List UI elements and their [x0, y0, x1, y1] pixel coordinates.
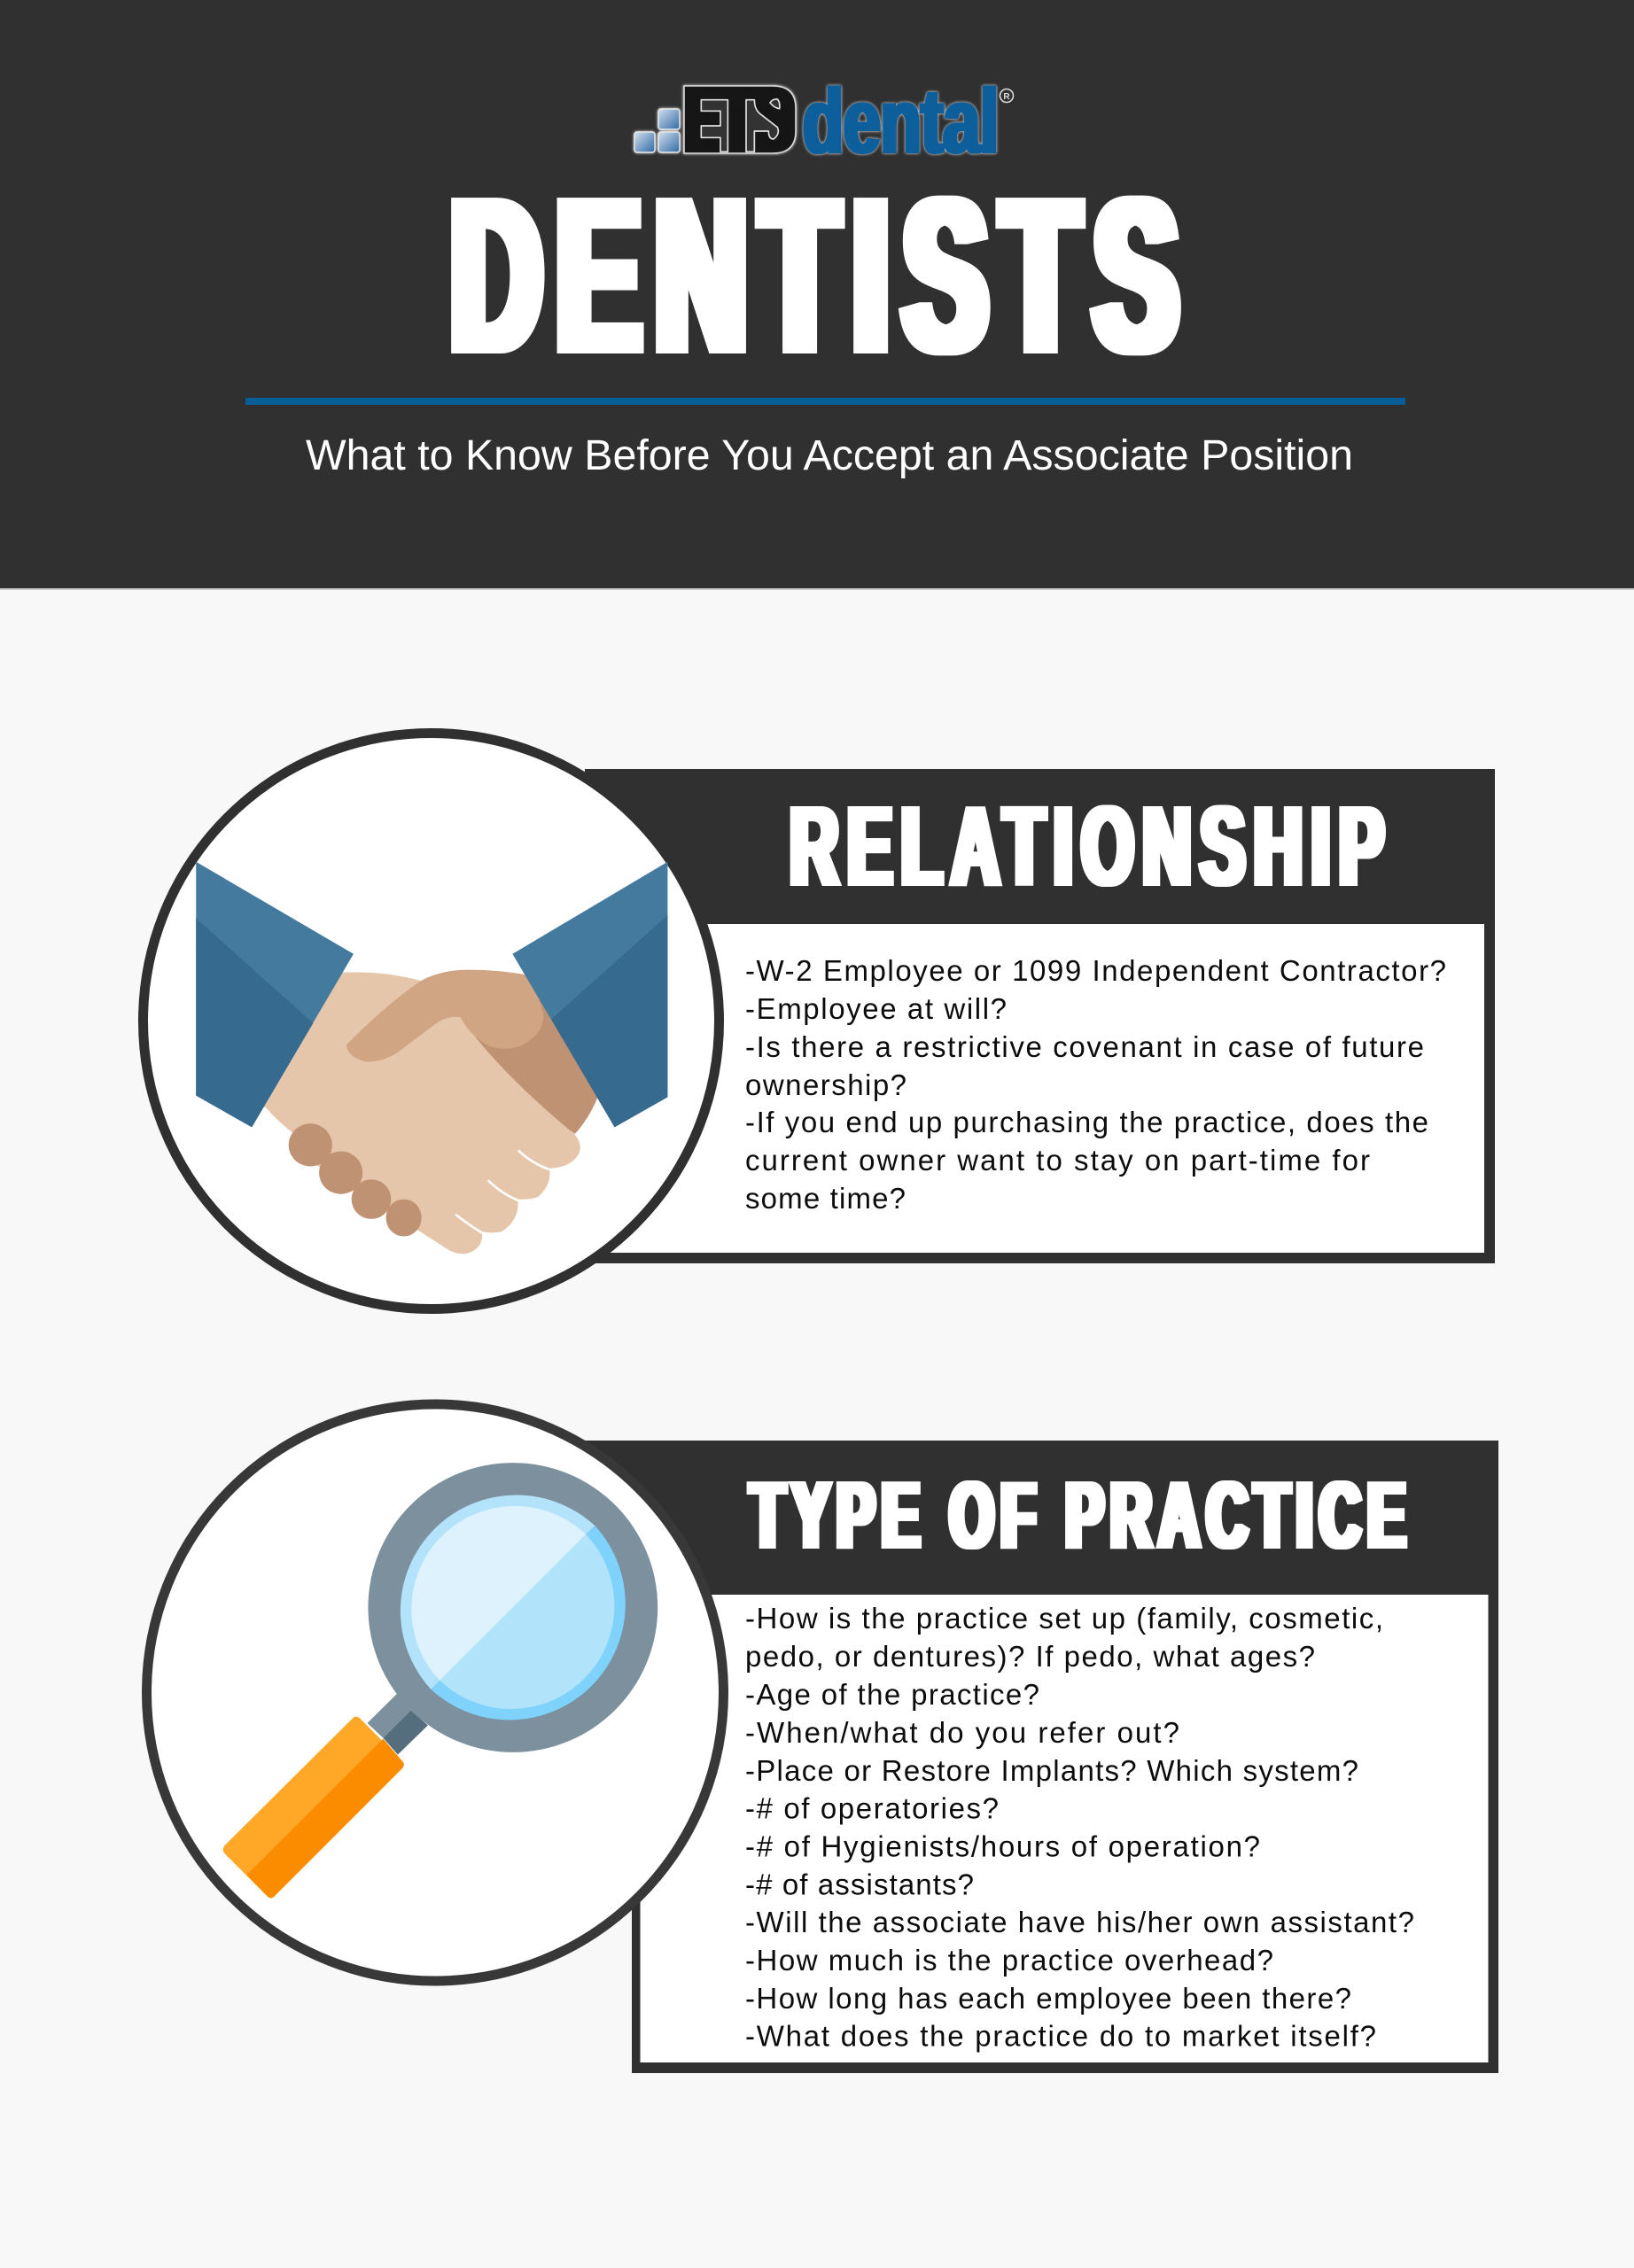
logo: ETS dental — [634, 70, 1014, 172]
type of practice question list: -# of Hygienists/hours of operation? — [745, 1830, 1260, 1862]
relationship question list: current owner want to stay on part-time for — [745, 1144, 1370, 1177]
type of practice question list: -How much is the practice overhead? — [745, 1944, 1273, 1977]
right sleeve — [512, 862, 667, 1127]
type of practice question list: -Place or Restore Implants? Which system? — [745, 1754, 1358, 1787]
back hand — [460, 978, 599, 1134]
type of practice question list: -When/what do you refer out? — [745, 1716, 1179, 1749]
relationship question list: some time? — [745, 1182, 906, 1215]
type of practice question list: -# of operatories? — [745, 1791, 999, 1825]
type of practice question list: -Will the associate have his/her own assistant? — [745, 1906, 1414, 1938]
heading: type of practice: TYPE OF PRACTICE — [751, 1463, 1405, 1568]
title: DENTISTS — [451, 155, 1178, 397]
magnifier lens — [401, 1495, 626, 1720]
relationship question list: -W-2 Employee or 1099 Independent Contractor? — [745, 954, 1446, 987]
panel frame — [585, 769, 1495, 1263]
logo registered mark: R — [1003, 92, 1010, 102]
relationship question list: ownership? — [745, 1068, 906, 1101]
logo registered mark — [1000, 89, 1014, 103]
magnifier rim — [368, 1463, 657, 1752]
subtitle: What to Know Before You Accept an Associate Position — [306, 432, 1353, 479]
type of practice question list: -Age of the practice? — [745, 1678, 1039, 1711]
header rule — [245, 398, 1405, 405]
panel frame — [585, 1441, 1498, 2073]
front hand — [259, 972, 580, 1254]
heading: relationship: RELATIONSHIP — [790, 785, 1384, 909]
type of practice question list: pedo, or dentures)? If pedo, what ages? — [745, 1640, 1315, 1673]
logo wordmark: ETS: ETS — [699, 91, 792, 160]
relationship question list — [745, 954, 1446, 1215]
panel: type of practice — [147, 1404, 1498, 2073]
finger gaps — [456, 1151, 549, 1233]
type of practice question list: -How is the practice set up (family, cosmetic, — [745, 1602, 1383, 1635]
thumb — [346, 970, 543, 1061]
icon: magnifying glass — [223, 1463, 657, 1898]
circle badge: type of practice — [147, 1404, 723, 1981]
circle badge: relationship — [144, 734, 720, 1309]
type of practice question list — [745, 1602, 1414, 2052]
header band — [0, 0, 1634, 590]
logo icon: stepped squares — [634, 109, 680, 152]
relationship question list: -Employee at will? — [745, 992, 1007, 1025]
magnifier shaft — [368, 1694, 428, 1755]
icon: handshake — [196, 862, 667, 1254]
panel: relationship — [144, 734, 1495, 1309]
type of practice question list: -What does the practice do to market itself? — [745, 2020, 1376, 2052]
magnifier handle — [223, 1717, 404, 1898]
relationship question list: -Is there a restrictive covenant in case of future — [745, 1030, 1424, 1063]
relationship question list: -If you end up purchasing the practice, does the — [745, 1106, 1428, 1138]
type of practice question list: -How long has each employee been there? — [745, 1982, 1351, 2015]
left sleeve — [196, 862, 354, 1127]
logo wordmark: ETS — [684, 86, 796, 160]
fingertips — [289, 1123, 422, 1237]
logo wordmark: dental: dental — [803, 70, 999, 172]
type of practice question list: -# of assistants? — [745, 1868, 974, 1901]
